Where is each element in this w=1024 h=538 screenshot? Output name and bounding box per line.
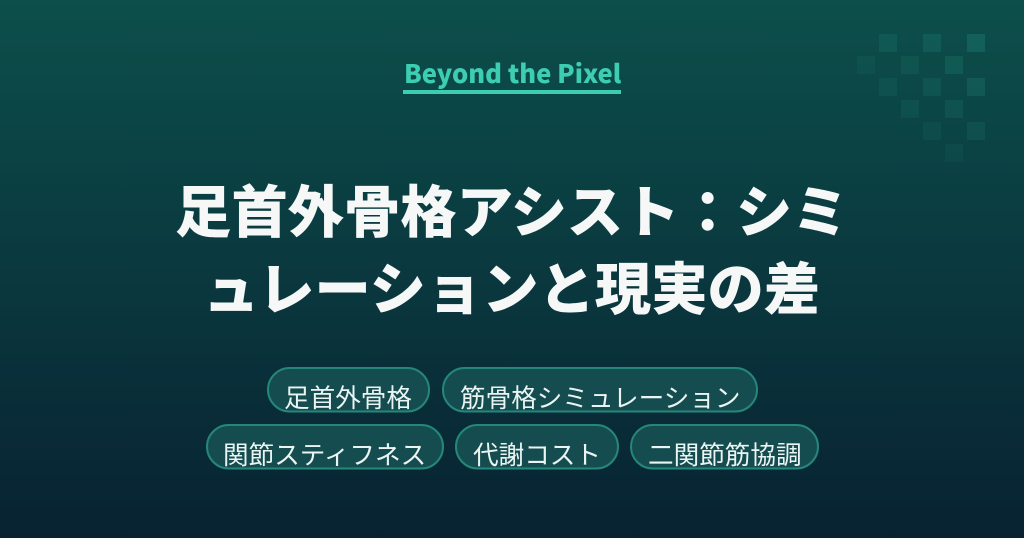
- tag: 足首外骨格: [267, 367, 430, 415]
- decorative square pattern: [879, 34, 985, 140]
- title: 足首外骨格アシスト：シミ: [175, 168, 848, 249]
- tag: 関節スティフネス: 関節スティフネス: [223, 435, 426, 472]
- brand label: Beyond the Pixel: Beyond the Pixel: [404, 54, 621, 91]
- tag: 筋骨格シミュレーション: [442, 367, 758, 415]
- tag: 二関節筋協調: 二関節筋協調: [648, 435, 802, 472]
- tag: 代謝コスト: 代謝コスト: [473, 435, 601, 472]
- tag: 筋骨格シミュレーション: 筋骨格シミュレーション: [460, 378, 741, 415]
- tag: 代謝コスト: [455, 424, 619, 472]
- tag: 足首外骨格: 足首外骨格: [284, 378, 412, 415]
- title: [175, 168, 848, 326]
- tag: 二関節筋協調: [630, 424, 819, 472]
- tag: 関節スティフネス: [206, 424, 444, 472]
- title: ュレーションと現実の差: [203, 245, 820, 326]
